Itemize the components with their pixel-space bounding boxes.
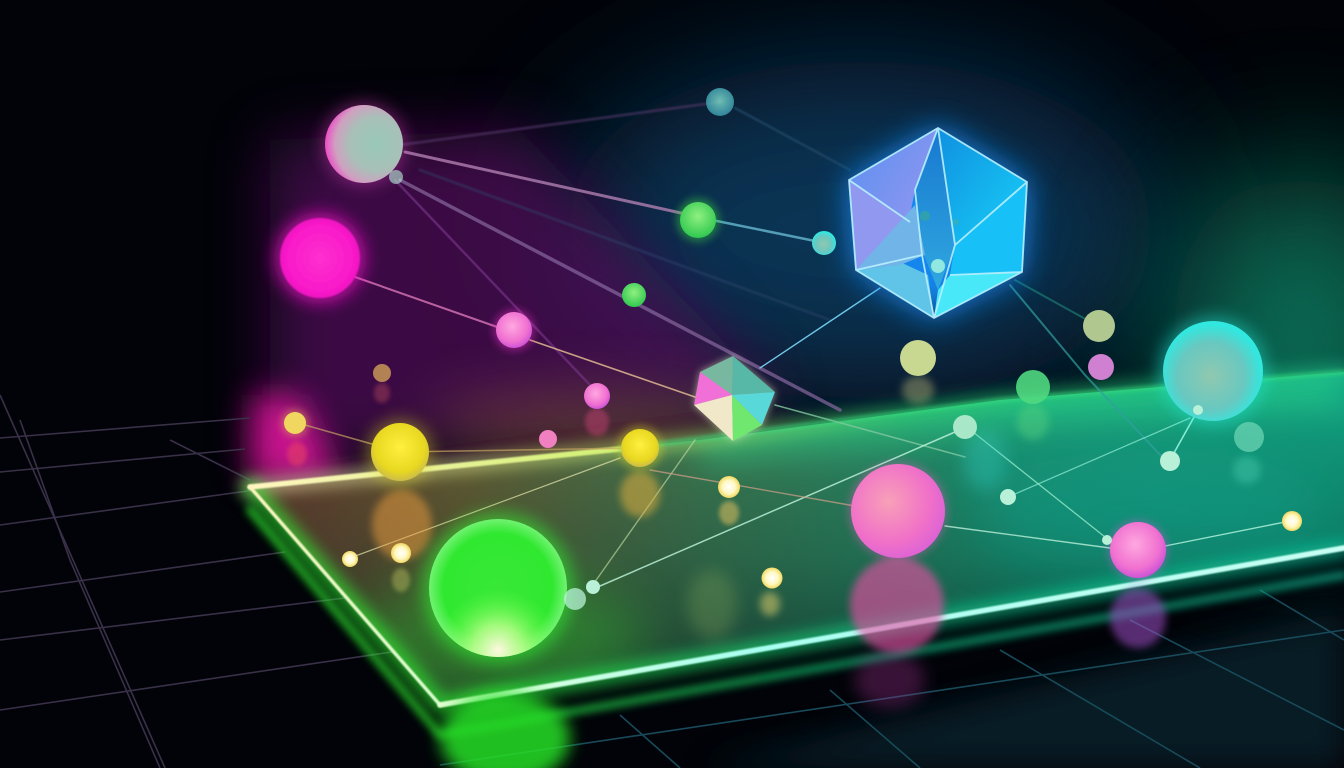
sphere: big aqua (1158, 316, 1268, 426)
spheres: upper left (274, 88, 836, 485)
warm platform-edge haze (430, 395, 770, 455)
sphere: small green (622, 283, 646, 307)
icon: blue polyhedron (849, 128, 1027, 318)
sphere: mint node (1234, 422, 1264, 452)
sphere: dim orange (373, 364, 391, 382)
network links (305, 102, 1290, 586)
sphere: pink node right (1088, 354, 1114, 380)
platform hazes (350, 385, 1344, 700)
floor grid (0, 395, 1344, 768)
glass platform (250, 372, 1344, 705)
sphere reflections (287, 376, 1261, 708)
spheres: on platform (342, 170, 1302, 664)
blue haze (560, 60, 1160, 400)
teal haze (1170, 170, 1344, 510)
sphere: green node (676, 198, 720, 242)
sphere: pink-green node (1083, 310, 1115, 342)
green reflection under platform (440, 692, 570, 768)
sphere: magenta (274, 212, 366, 304)
sphere: violet (1108, 520, 1168, 580)
sphere: yellow tiny (281, 409, 309, 437)
sphere: big green (422, 512, 574, 664)
sphere: mint small (953, 415, 977, 439)
sphere: cyan node (812, 231, 836, 255)
pink wall base (250, 395, 340, 484)
sphere: top node (706, 88, 734, 116)
sphere: yellow (367, 419, 433, 485)
sphere: big pink (848, 461, 948, 561)
sphere: pale node (900, 340, 936, 376)
floor teal wash (700, 610, 1344, 768)
small mint nodes (389, 170, 1203, 610)
sphere: pale yellow (617, 425, 663, 471)
platform edge glow (250, 372, 1344, 735)
violet haze (270, 130, 780, 470)
glowing orbs (342, 476, 1302, 588)
icon: rainbow polyhedron (694, 356, 775, 441)
sphere: pink node (493, 309, 535, 351)
sphere: pearl (322, 102, 406, 186)
sphere: pink tiny (539, 430, 557, 448)
sphere: green node right (1016, 370, 1050, 404)
sphere: pink small (584, 383, 610, 409)
